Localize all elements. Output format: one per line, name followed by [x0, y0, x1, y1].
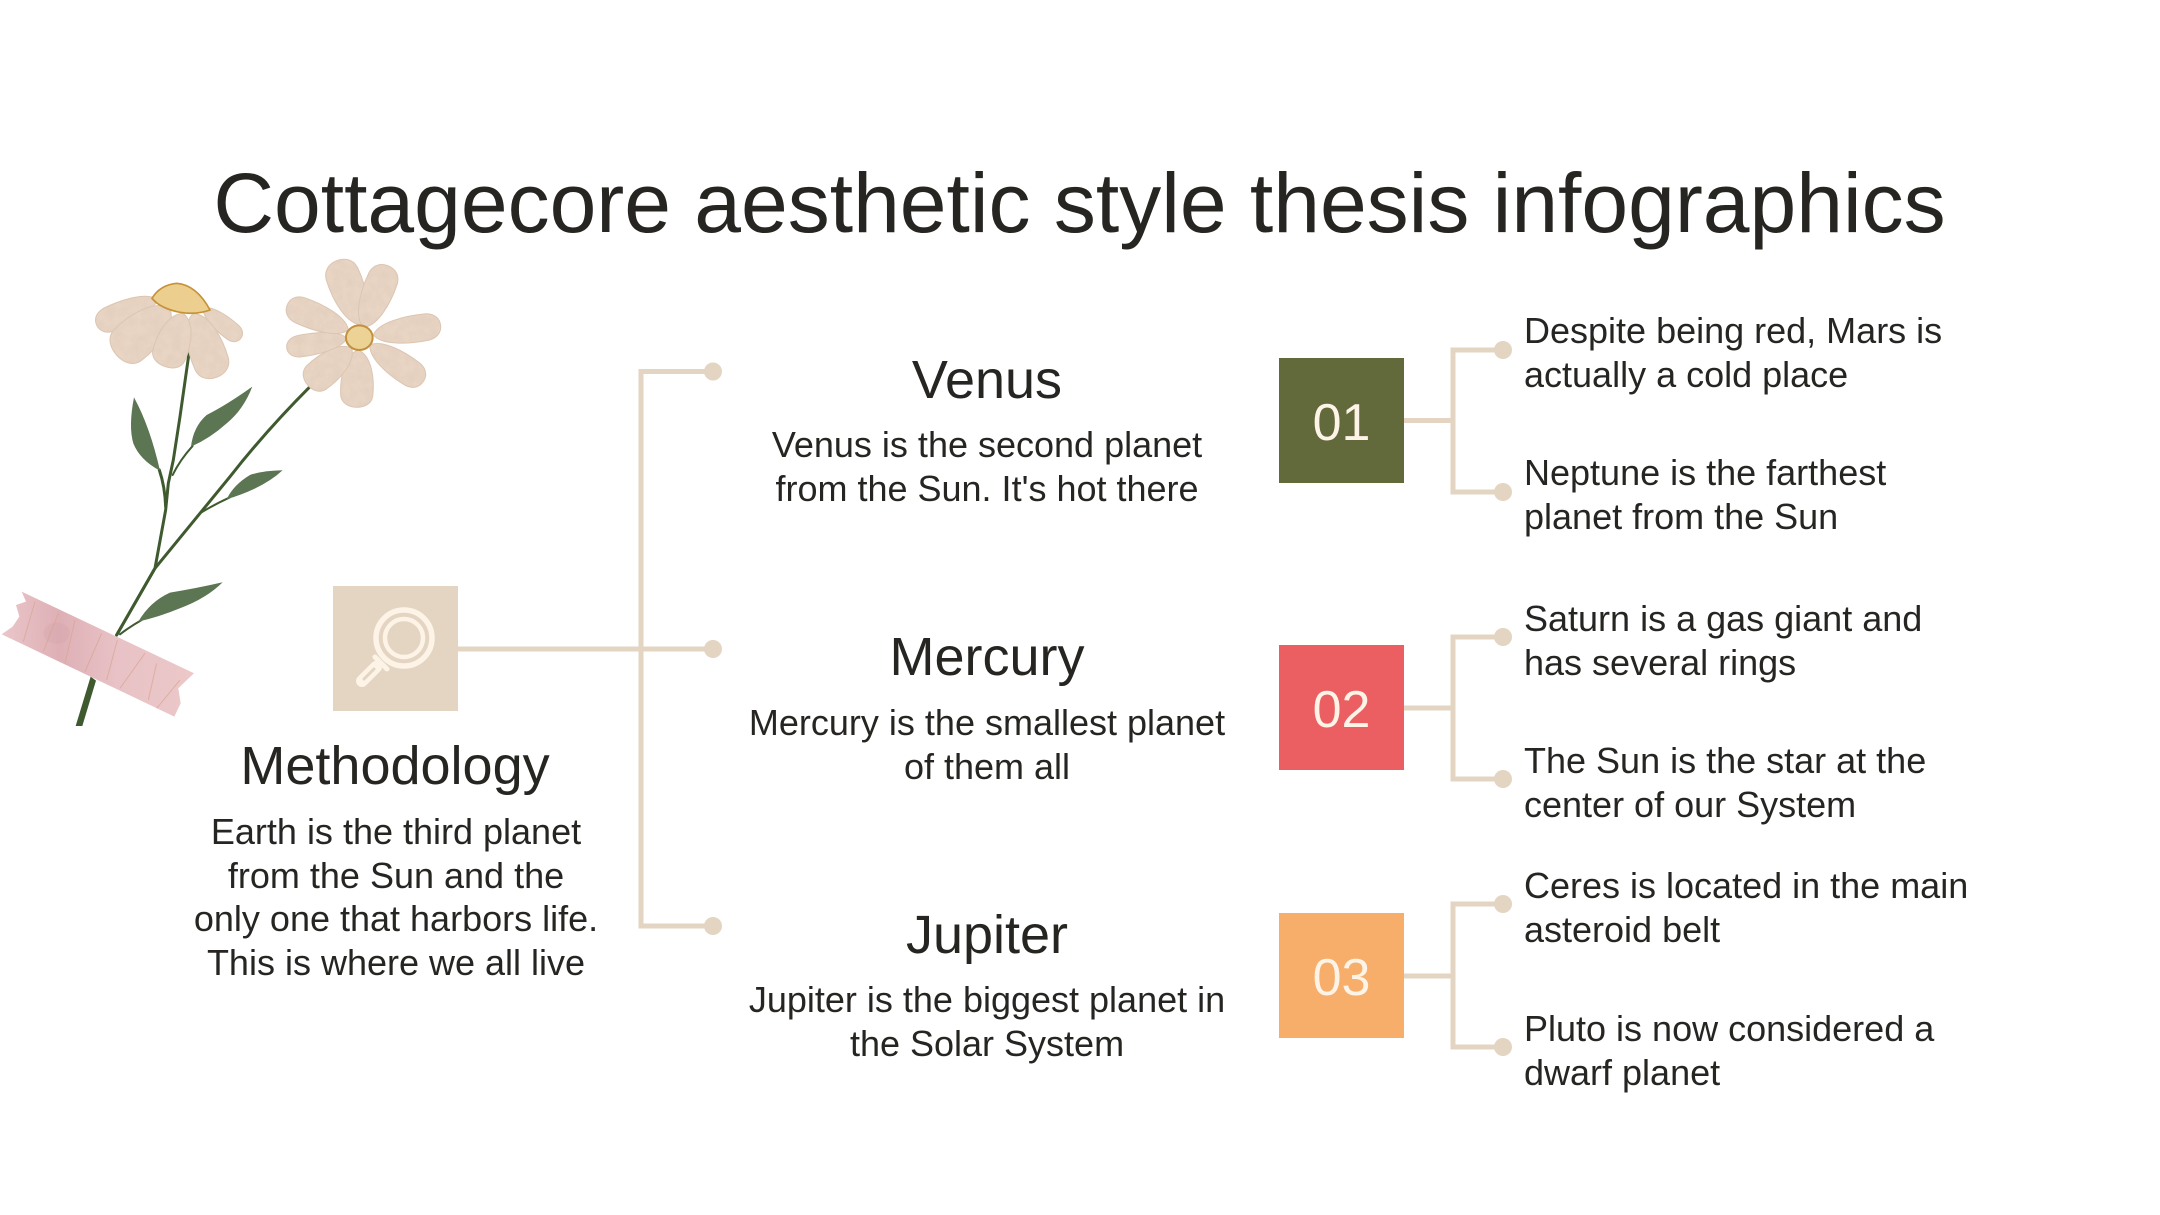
text: Mars: actually a cold place — [1524, 354, 1848, 394]
heading: Jupiter: Jupiter — [906, 905, 1068, 965]
text: Pluto: dwarf planet — [1524, 1052, 1720, 1092]
title: Cottagecore aesthetic style thesis infographics — [213, 156, 1946, 250]
left daisy — [92, 288, 246, 383]
heading: Methodology: Methodology — [240, 736, 550, 796]
text: Ceres — [1524, 865, 1968, 950]
text: Ceres: Ceres is located in the main — [1524, 865, 1968, 906]
text: Venus description — [772, 424, 1202, 508]
text: The Sun: The Sun is the star at the — [1524, 740, 1926, 781]
text: Saturn: Saturn is a gas giant and — [1524, 598, 1922, 639]
text: Methodology description: only one that harbors life. — [194, 898, 598, 939]
number box 01 — [1279, 358, 1404, 483]
text: Methodology description — [194, 811, 598, 982]
leaves — [131, 387, 283, 622]
text: Ceres: asteroid belt — [1524, 908, 1720, 950]
text: Neptune — [1524, 452, 1886, 536]
text: Methodology description: Earth is the third planet — [211, 811, 581, 852]
text: Methodology description: from the Sun and the — [228, 854, 564, 896]
text: Methodology description: This is where we all live — [207, 942, 585, 982]
text: Jupiter description — [749, 979, 1225, 1064]
heading: Mercury: Mercury — [889, 627, 1084, 687]
text: Jupiter description: the Solar System — [850, 1022, 1124, 1064]
number box 02 — [1279, 645, 1404, 770]
text: Pluto: Pluto is now considered a — [1524, 1008, 1934, 1049]
text: Venus description: from the Sun. It's hot there — [775, 468, 1199, 508]
text: Venus description: Venus is the second planet — [772, 424, 1202, 465]
text: Mercury description — [749, 702, 1225, 786]
text: The Sun — [1524, 740, 1926, 824]
text: Mars — [1524, 310, 1942, 394]
text: Neptune: Neptune is the farthest — [1524, 452, 1886, 493]
right daisy — [282, 254, 443, 408]
text: Neptune: planet from the Sun — [1524, 496, 1838, 536]
text: The Sun: center of our System — [1524, 784, 1856, 824]
stems — [117, 342, 310, 635]
text: Pluto — [1524, 1008, 1934, 1092]
number box 01: 01 — [1313, 394, 1370, 452]
text: Mercury description: of them all — [904, 746, 1070, 786]
heading: Venus: Venus — [912, 350, 1062, 410]
number box 02: 02 — [1313, 681, 1370, 739]
number box 03: 03 — [1313, 949, 1370, 1007]
text: Saturn — [1524, 598, 1922, 682]
text: Mars: Despite being red, Mars is — [1524, 310, 1942, 351]
icon: magnifying glass — [333, 586, 458, 711]
number box 03 — [1279, 913, 1404, 1038]
text: Jupiter description: Jupiter is the biggest planet in — [749, 979, 1225, 1020]
text: Saturn: has several rings — [1524, 642, 1796, 682]
text: Mercury description: Mercury is the smallest planet — [749, 702, 1225, 743]
washi tape — [2, 592, 194, 717]
